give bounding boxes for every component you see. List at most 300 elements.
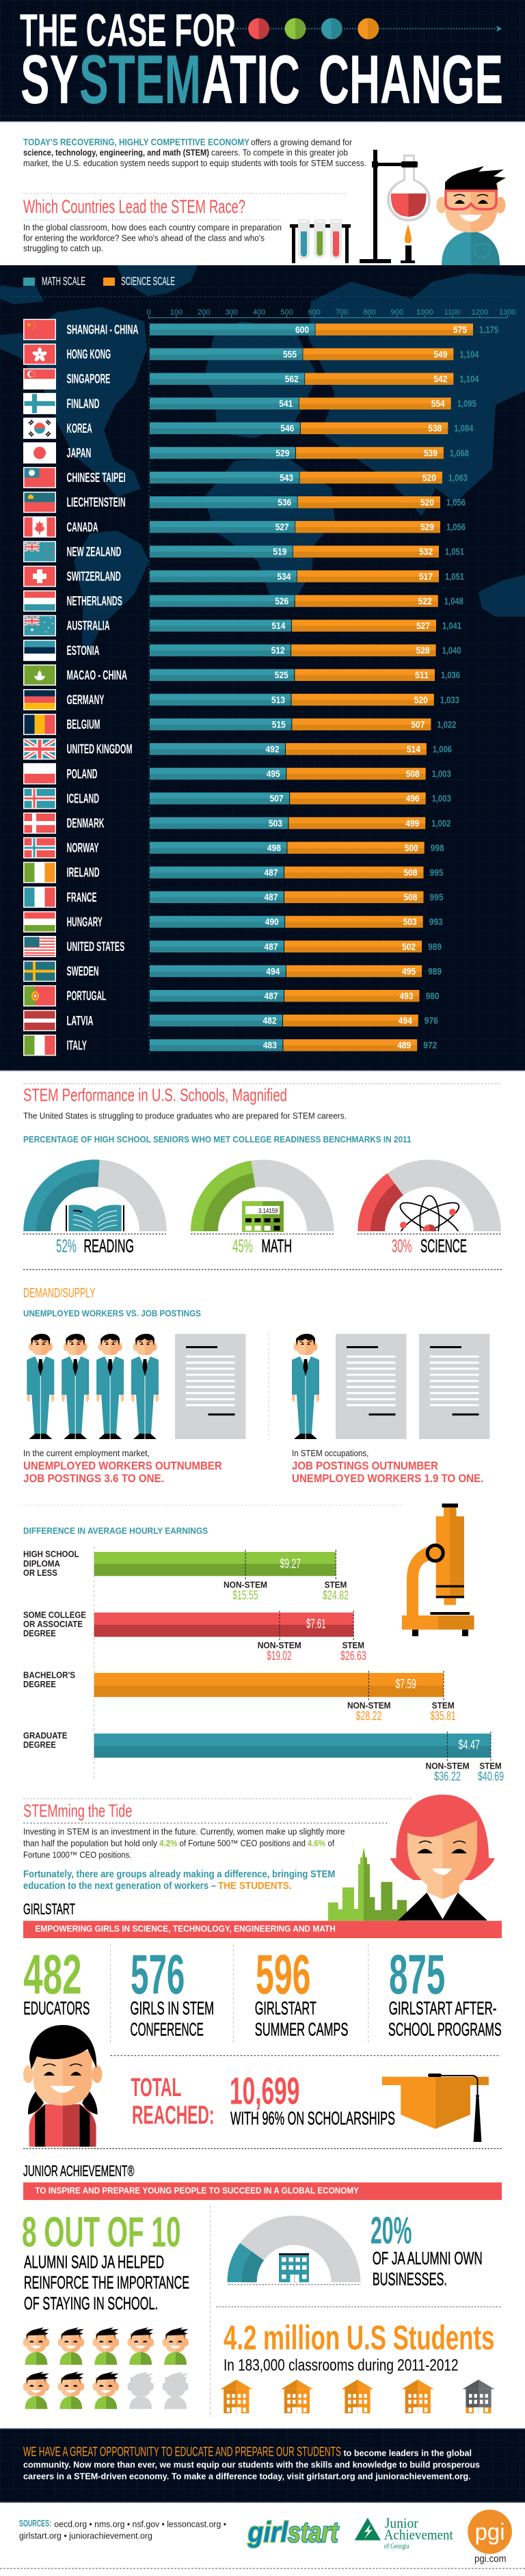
score bars: 575 (453, 324, 467, 335)
score bars: 508 (406, 768, 420, 779)
score bars (150, 867, 444, 878)
score bars: 1,002 (431, 818, 450, 829)
score bars: 527 (275, 522, 289, 533)
score bars: 554 (431, 398, 445, 409)
score bars: 520 (420, 497, 434, 508)
stat: 4.2 million students (224, 2319, 495, 2374)
row: some college (23, 1610, 366, 1663)
score bars (150, 990, 440, 1002)
logo: Junior Achievement (355, 2515, 453, 2550)
stat: 8 out of 10 (22, 2209, 189, 2313)
gauge: science 30% (358, 1159, 501, 1257)
flag: Iceland (23, 788, 56, 809)
text: investing in STEM: Fortune 1000™ CEO positions. (23, 1851, 131, 1860)
score bars: 1,063 (448, 472, 468, 483)
score bars: 980 (425, 990, 440, 1001)
logo: Girlstart (247, 2516, 339, 2548)
flag: New Zealand (23, 541, 56, 562)
score bars (150, 1039, 437, 1051)
score bars: 529 (420, 522, 434, 533)
intro text: TODAY'S RECOVERING, HIGHLY COMPETITIVE ECONOMY (23, 136, 250, 147)
pictogram: school buildings (220, 2380, 495, 2413)
panel: call to action: WE HAVE A GREAT OPPORTUNITY TO EDUCATE AND PREPARE OUR STUDENTS (23, 2444, 341, 2459)
logo: Girlstart: girl (247, 2516, 288, 2548)
row: United States (23, 936, 442, 957)
score axis: 500 (280, 308, 293, 317)
flag: United States (23, 936, 56, 957)
icon: scientist with goggles (436, 166, 506, 265)
row: high school: DIPLOMA (23, 1559, 60, 1568)
callout: STEM occupations: UNEMPLOYED WORKERS 1.9 TO ONE. (292, 1472, 483, 1485)
row: Japan (23, 442, 469, 464)
heading: demand/supply: DEMAND/SUPPLY (23, 1285, 96, 1300)
callout: STEM occupations (292, 1449, 483, 1485)
score bars (150, 570, 464, 582)
callout: general market: JOB POSTINGS 3.6 TO ONE. (23, 1472, 164, 1485)
logo: Junior Achievement: Achievement (384, 2526, 453, 2543)
country name: NORWAY (67, 842, 99, 856)
row: bachelor's: $28.22 (356, 1708, 381, 1723)
score bars: 487 (264, 891, 278, 902)
text: investing in STEM: of (328, 1839, 334, 1849)
country name: ESTONIA (67, 644, 100, 658)
score bars: 508 (403, 867, 418, 878)
score bars: 1,006 (433, 743, 452, 754)
row: bachelor's (23, 1670, 456, 1723)
legend: SCIENCE SCALE (121, 274, 175, 288)
row: bachelor's: $7.59 (395, 1676, 416, 1691)
icon: flask on stand with burner (360, 150, 431, 263)
score bars (150, 743, 452, 755)
score axis: 1100 (444, 308, 460, 317)
icon: test tubes in rack (290, 219, 351, 263)
score bars: 495 (402, 965, 416, 976)
flag: Portugal (23, 985, 56, 1006)
score bars (150, 546, 464, 558)
text: global classroom: In the global classroom, how does each country compare in preparation (23, 223, 282, 232)
flag: Ireland (23, 862, 56, 883)
subheading: percentage: PERCENTAGE OF HIGH SCHOOL SENIORS WHO MET COLLEGE READINESS BENCHMARKS IN 2011 (23, 1134, 412, 1144)
gauge: math 45% (191, 1159, 334, 1257)
country name: UNITED KINGDOM (67, 742, 133, 757)
logo: PGI (468, 2510, 512, 2564)
score bars (150, 817, 450, 829)
text: investing in STEM: of Fortune 500™ CEO positions and (179, 1839, 306, 1849)
score bars: 490 (265, 916, 279, 927)
row: some college: $7.61 (306, 1616, 326, 1631)
stat: educators: EDUCATORS (23, 1998, 90, 2019)
score bars (150, 916, 443, 928)
panel: call to action: community. Now more than ever, we must equip our students with the skills and knowledge to build prosperous (23, 2459, 480, 2469)
stat: educators (23, 1944, 90, 2019)
score bars (150, 422, 473, 434)
score bars: 989 (428, 965, 442, 976)
flag: Japan (23, 442, 56, 464)
flag: Australia (23, 615, 56, 636)
stat: total reached (131, 2069, 395, 2130)
flag: Macao (23, 665, 56, 686)
score bars: 562 (285, 373, 299, 384)
score bars: 487 (264, 941, 278, 952)
country name: HUNGARY (67, 915, 103, 930)
row: high school: NON-STEM (224, 1579, 267, 1589)
gauge: 20% own businesses (227, 2216, 361, 2285)
score bars: 555 (283, 349, 297, 360)
flag: Sweden (23, 961, 56, 982)
flag: Belgium (23, 714, 56, 735)
country name: SINGAPORE (67, 373, 110, 387)
score bars (150, 694, 459, 706)
row: high school: $9.27 (280, 1556, 301, 1571)
country name: LATVIA (67, 1014, 94, 1028)
row: bachelor's: DEGREE (23, 1680, 56, 1689)
country name: POLAND (67, 767, 97, 781)
score bars (150, 645, 461, 656)
panel: call to action: to become leaders in the global (343, 2447, 472, 2458)
score bars: 483 (263, 1040, 277, 1051)
panel: call to action: careers in a STEM-driven economy. To make a difference today, visit girlstart.org and juniorachievement.org. (23, 2471, 471, 2481)
panel: title header (0, 0, 525, 122)
row: some college: STEM (342, 1640, 364, 1650)
score bars: 515 (272, 719, 286, 729)
score bars: 998 (431, 842, 444, 853)
row: graduate (23, 1731, 504, 1784)
country name: FRANCE (67, 891, 97, 905)
score bars (150, 447, 469, 459)
flag: Germany (23, 689, 56, 710)
score bars: 542 (433, 373, 448, 384)
score axis: 1300 (499, 308, 516, 317)
intro text: offers a growing demand for (251, 137, 352, 147)
score bars (150, 496, 466, 508)
label: reading: 52% (56, 1236, 77, 1257)
stat: summer camps: 596 (256, 1944, 310, 2006)
flag: Liechtenstein (23, 492, 56, 513)
score bars: 536 (278, 497, 291, 508)
score bars: 600 (295, 324, 309, 335)
score bars: 529 (275, 447, 290, 458)
score axis: 1200 (472, 308, 488, 317)
score axis: 100 (170, 308, 183, 317)
score bars (150, 965, 442, 977)
country name: JAPAN (67, 446, 91, 461)
score bars: 1,056 (446, 522, 466, 533)
country name: BELGIUM (67, 718, 100, 732)
icon: atom (399, 1195, 459, 1231)
flag: Estonia (23, 640, 56, 661)
score bars: 538 (428, 422, 442, 433)
score bars: 1,036 (441, 669, 460, 680)
row: Hong Kong (23, 344, 479, 365)
stat: 8 out of 10: ALUMNI SAID JA HELPED (24, 2251, 164, 2272)
subheading: hourly earnings: DIFFERENCE IN AVERAGE HOURLY EARNINGS (23, 1526, 208, 1536)
stat: summer camps: GIRLSTART (255, 1998, 317, 2019)
dotted arrow with colour dots (234, 18, 502, 40)
stat: summer camps (255, 1944, 348, 2039)
label: math: MATH (261, 1236, 292, 1257)
score bars (150, 348, 479, 360)
country name: CHINESE TAIPEI (67, 471, 126, 485)
score bars: 482 (262, 1015, 277, 1026)
score axis: 1000 (416, 308, 433, 317)
row: Denmark (23, 812, 450, 834)
flag: Norway (23, 837, 56, 859)
pictogram: two job postings (336, 1334, 489, 1439)
chart: hourly earnings (23, 1546, 504, 1784)
score bars: 492 (265, 743, 280, 754)
flag: Canada (23, 516, 56, 537)
stat: total reached: REACHED: (132, 2102, 215, 2130)
flag: Korea (23, 418, 56, 439)
stat: 4.2 million students: In 183,000 classrooms during 2011-2012 (224, 2356, 458, 2374)
row: Latvia (23, 1010, 438, 1031)
flag: Singapore (23, 368, 56, 390)
icon: calculator: 3.14159 (258, 1207, 278, 1215)
score bars (150, 792, 451, 805)
banner: JA mission (23, 2182, 502, 2200)
sources: SOURCES: (19, 2518, 51, 2529)
row: Estonia (23, 640, 461, 661)
text: global classroom: for entering the workforce? See who's ahead of the class and who's (23, 233, 265, 243)
row: graduate: $36.22 (434, 1769, 461, 1784)
score bars (150, 1015, 438, 1027)
stat: girls in STEM conference: CONFERENCE (130, 2019, 204, 2039)
stat: 8 out of 10: 8 OUT OF 10 (22, 2209, 180, 2256)
score bars: 514 (407, 743, 420, 754)
score bars (150, 619, 461, 632)
row: graduate: STEM (479, 1761, 502, 1771)
country name: PORTUGAL (67, 989, 107, 1004)
heading: Girlstart: GIRLSTART (23, 1901, 75, 1918)
score bars: 487 (264, 867, 278, 878)
row: some college: $19.02 (267, 1648, 292, 1663)
stat: educators: 482 (23, 1944, 81, 2006)
flag: Chinese Taipei (23, 467, 56, 488)
country name: ITALY (67, 1038, 87, 1053)
row: Sweden (23, 961, 442, 982)
icon: graduation cap (382, 2074, 489, 2142)
score bars: 995 (429, 891, 444, 902)
score bars: 508 (403, 891, 418, 902)
row: Australia (23, 615, 461, 636)
country name: SHANGHAI - CHINA (67, 323, 139, 338)
text: groups making a difference: education to the next generation of workers – (23, 1880, 216, 1892)
sources: oecd.org • nms.org • nsf.gov • lessoncast.org • (54, 2520, 226, 2530)
score bars: 498 (267, 842, 281, 853)
intro text (23, 136, 366, 168)
row: Belgium (23, 714, 457, 735)
row: some college: $26.63 (340, 1648, 366, 1663)
pictogram: 8 of 10 students (23, 2327, 189, 2409)
stat: girls in STEM conference: GIRLS IN STEM (130, 1998, 214, 2019)
score bars: 532 (419, 546, 433, 557)
logo: Girlstart: start (288, 2516, 339, 2548)
icon: woman portrait (390, 1795, 495, 1920)
label: math: 45% (232, 1236, 253, 1257)
score axis: 200 (198, 308, 210, 317)
score bars: 993 (429, 916, 443, 927)
score bars: 487 (264, 990, 278, 1001)
stat: girls in STEM conference: 576 (131, 1944, 185, 2006)
score bars (150, 669, 460, 681)
row: Canada (23, 516, 466, 537)
row: Iceland (23, 788, 451, 809)
score bars: 1,104 (459, 349, 479, 360)
pictogram: one worker (292, 1334, 319, 1439)
row: Netherlands (23, 591, 463, 612)
score bars: 989 (428, 941, 442, 952)
row: Ireland (23, 862, 444, 883)
heading: Junior Achievement: JUNIOR ACHIEVEMENT® (23, 2162, 134, 2179)
score bars: 534 (277, 571, 291, 582)
row: Liechtenstein (23, 492, 466, 513)
heading: which countries: Which Countries Lead the STEM Race? (23, 196, 245, 217)
score bars: 1,003 (432, 768, 451, 779)
label: reading: READING (83, 1236, 134, 1257)
score bars (150, 719, 457, 730)
title: SY (21, 42, 79, 118)
pictogram: four workers (27, 1334, 159, 1439)
score bars (150, 941, 442, 952)
country name: SWEDEN (67, 965, 98, 979)
score axis: 900 (391, 308, 403, 317)
score bars: 519 (273, 546, 287, 557)
score bars: 494 (266, 965, 280, 976)
row: some college: NON-STEM (258, 1640, 301, 1650)
stat: total reached: WITH 96% ON SCHOLARSHIPS (230, 2108, 395, 2129)
score bars: 1,095 (457, 398, 476, 409)
flag: China (23, 319, 56, 340)
icon: book (66, 1205, 124, 1231)
score bars: 541 (279, 398, 293, 409)
score bars: 496 (406, 793, 420, 804)
score axis: 300 (225, 308, 238, 317)
row: Korea (23, 418, 473, 439)
score bars: 489 (397, 1040, 411, 1051)
label: science: 30% (392, 1236, 412, 1257)
score bars (150, 891, 444, 903)
callout: general market (23, 1449, 222, 1485)
row: Shanghai-China (23, 319, 498, 340)
score bars (150, 373, 479, 385)
score bars: 526 (275, 595, 288, 606)
score bars: 976 (425, 1015, 438, 1026)
row: bachelor's: $35.81 (430, 1708, 456, 1723)
score axis: 600 (308, 308, 321, 317)
flag: Hungary (23, 911, 56, 933)
row: Portugal (23, 985, 440, 1006)
text: investing in STEM: 4.2% (159, 1839, 178, 1849)
row: Norway (23, 837, 444, 859)
score axis: 700 (336, 308, 348, 317)
row: Italy (23, 1034, 437, 1056)
row: New Zealand (23, 541, 464, 562)
text: investing in STEM (23, 1827, 345, 1860)
row: France (23, 887, 444, 908)
score bars (150, 521, 466, 533)
score bars: 543 (280, 472, 293, 483)
row: Macao-China (23, 665, 460, 686)
row: graduate: $40.69 (478, 1769, 504, 1784)
country name: UNITED STATES (67, 940, 124, 954)
legend: MATH SCALE (42, 274, 85, 288)
country name: NETHERLANDS (67, 595, 122, 609)
icon: city skyline (328, 1847, 407, 1921)
title: STEM (79, 42, 201, 118)
country name: KOREA (67, 422, 92, 436)
score bars (150, 398, 476, 410)
text: investing in STEM: Investing in STEM is an investment in the future. Currently, women make up slightly more (23, 1827, 345, 1837)
icon: calculator (242, 1201, 284, 1232)
row: Germany (23, 689, 459, 710)
flag: Hong Kong (23, 344, 56, 365)
score bars: 549 (433, 349, 448, 360)
stat: total reached: TOTAL (131, 2074, 182, 2102)
flag: Finland (23, 393, 56, 414)
score bars: 546 (280, 422, 294, 433)
text: groups making a difference (23, 1868, 335, 1892)
flag: Denmark (23, 812, 56, 834)
score axis: 400 (253, 308, 265, 317)
score bars: 539 (424, 447, 438, 458)
row: high school: HIGH SCHOOL (23, 1550, 79, 1559)
score bars: 1,022 (437, 719, 457, 729)
score bars: 1,040 (442, 645, 461, 656)
row: graduate: DEGREE (23, 1741, 56, 1750)
text: global classroom: struggling to catch up. (23, 244, 103, 254)
score bars: 499 (405, 818, 419, 829)
sources: girlstart.org • juniorachievement.org (19, 2531, 152, 2540)
row: Hungary (23, 911, 443, 933)
callout: general market: UNEMPLOYED WORKERS OUTNUMBER (23, 1459, 222, 1472)
stat: total reached: 10,699 (230, 2069, 299, 2112)
score bars: 511 (415, 669, 429, 680)
row: high school (23, 1550, 349, 1602)
score bars: 1,068 (450, 447, 469, 458)
score bars: 527 (416, 620, 430, 631)
country name: SWITZERLAND (67, 570, 121, 584)
flag: Italy (23, 1034, 56, 1056)
score bars: 1,104 (459, 373, 479, 384)
heading: STEM performance: STEM Performance in U.S. Schools, Magnified (23, 1085, 287, 1105)
logo: Junior Achievement: Junior (385, 2515, 418, 2532)
callout: general market: In the current employment market, (23, 1449, 150, 1458)
banner: Girlstart mission: EMPOWERING GIRLS IN SCIENCE, TECHNOLOGY, ENGINEERING AND MATH (35, 1923, 336, 1933)
panel: call to action (0, 2428, 525, 2503)
text: groups making a difference: Fortunately, there are groups already making a difference, bringing STEM (23, 1868, 335, 1880)
score bars: 1,048 (444, 595, 463, 606)
row: some college: OR ASSOCIATE (23, 1620, 83, 1629)
flag: Latvia (23, 1010, 56, 1031)
score bars: 995 (429, 867, 444, 878)
stat: girls in STEM conference (130, 1944, 214, 2039)
score bars: 1,041 (442, 620, 461, 631)
country name: AUSTRALIA (67, 619, 110, 634)
score bars (150, 472, 468, 483)
flag: France (23, 887, 56, 908)
score bars: 495 (267, 768, 280, 779)
stat: 8 out of 10: REINFORCE THE IMPORTANCE (24, 2272, 189, 2293)
row: high school: $24.82 (323, 1587, 349, 1602)
score bars (150, 768, 451, 779)
stat: summer camps: SUMMER CAMPS (255, 2019, 348, 2039)
text: struggling: The United States is struggling to produce graduates who are prepared for STEM careers. (23, 1112, 347, 1121)
legend (23, 274, 175, 288)
row: some college: DEGREE (23, 1629, 56, 1639)
title: ATIC (202, 42, 300, 118)
callout: STEM occupations: JOB POSTINGS OUTNUMBER (292, 1459, 438, 1472)
country name: DENMARK (67, 816, 105, 831)
